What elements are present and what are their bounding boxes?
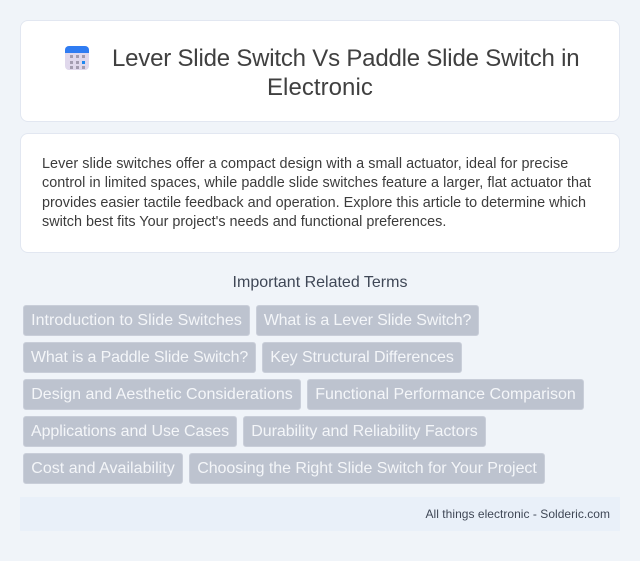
- tag: Design and Aesthetic Considerations: [31, 386, 293, 403]
- intro text card: [20, 133, 620, 253]
- tag: Key Structural Differences: [270, 349, 454, 366]
- intro paragraph: switch best fits Your project's needs and functional preferences.: [42, 214, 446, 230]
- intro paragraph: provides easier tactile feedback and operation. Explore this article to determine which: [42, 195, 586, 211]
- tag: [256, 305, 479, 336]
- related terms heading: Important Related Terms: [233, 274, 407, 291]
- intro paragraph: [42, 156, 591, 230]
- tag: [307, 379, 584, 410]
- title: Electronic: [267, 74, 373, 101]
- tag: [23, 416, 237, 447]
- icon: calendar: [65, 46, 89, 70]
- footer bar: [20, 497, 620, 531]
- tag: Introduction to Slide Switches: [31, 312, 242, 329]
- intro paragraph: Lever slide switches offer a compact design with a small actuator, ideal for precise: [42, 156, 568, 172]
- tag: Durability and Reliability Factors: [251, 423, 478, 440]
- tag: Choosing the Right Slide Switch for Your Project: [197, 460, 537, 477]
- tag: [23, 305, 250, 336]
- tag: What is a Paddle Slide Switch?: [31, 349, 248, 366]
- tag: Cost and Availability: [31, 460, 175, 477]
- tag: Applications and Use Cases: [31, 423, 229, 440]
- term tags: [23, 305, 584, 484]
- intro paragraph: control in limited spaces, while paddle slide switches feature a larger, flat actuator that: [42, 175, 591, 191]
- tag: What is a Lever Slide Switch?: [264, 312, 471, 329]
- tag: [189, 453, 545, 484]
- tag: Functional Performance Comparison: [315, 386, 576, 403]
- footer text: All things electronic - Solderic.com: [426, 507, 610, 521]
- header card: [20, 20, 620, 122]
- title: Lever Slide Switch Vs Paddle Slide Switch in: [112, 45, 579, 72]
- tag: [23, 379, 301, 410]
- tag: [23, 342, 256, 373]
- tag: [262, 342, 462, 373]
- tag: [243, 416, 486, 447]
- tag: [23, 453, 183, 484]
- title: [112, 45, 579, 101]
